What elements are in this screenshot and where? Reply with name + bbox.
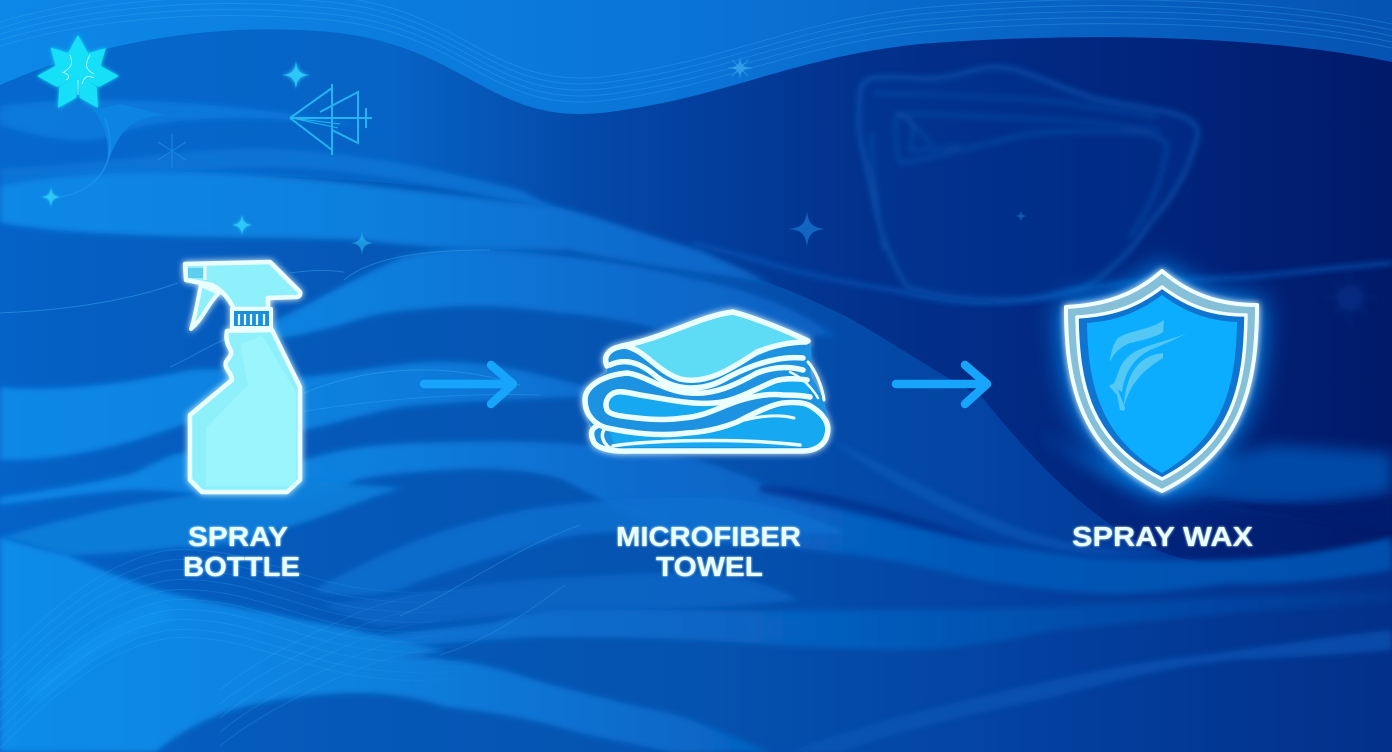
panel: spray wax bbox=[1066, 271, 1257, 552]
panel: spray bottle bbox=[183, 262, 300, 582]
label: microfiber towel bbox=[616, 521, 801, 582]
label: spray bottle bbox=[183, 521, 300, 582]
thin light line across right bbox=[692, 243, 1392, 303]
icon: spray bottle bbox=[185, 262, 300, 492]
background: bottom-left light wave bbox=[0, 537, 770, 752]
icon: dark sun star bbox=[1324, 272, 1376, 326]
icon: faint snowflake bbox=[158, 134, 186, 168]
upper left streak bands bbox=[0, 100, 400, 140]
icon: geometric arrow star bbox=[290, 84, 372, 155]
icon: folded towel bbox=[585, 312, 829, 452]
label: microfiber towel: TOWEL bbox=[656, 551, 763, 582]
ghost boat outline bbox=[858, 67, 1198, 300]
feather emblem bbox=[1109, 320, 1187, 411]
label: spray bottle: SPRAY bbox=[188, 521, 288, 552]
panel: microfiber towel bbox=[585, 312, 829, 582]
icon: shield bbox=[1066, 271, 1257, 491]
glow behind shield bbox=[1066, 271, 1257, 491]
label: spray bottle: BOTTLE bbox=[183, 551, 300, 582]
icon: cyan snowflake flower bbox=[37, 35, 119, 113]
icon: sparkles and faint stars bbox=[41, 57, 1027, 255]
icon: small top snowflake bbox=[728, 60, 752, 76]
arrow: towel to wax bbox=[896, 365, 987, 404]
label: microfiber towel: MICROFIBER bbox=[616, 521, 801, 552]
arrow: bottle to towel bbox=[424, 365, 513, 404]
label: spray wax: SPRAY WAX bbox=[1072, 521, 1253, 552]
